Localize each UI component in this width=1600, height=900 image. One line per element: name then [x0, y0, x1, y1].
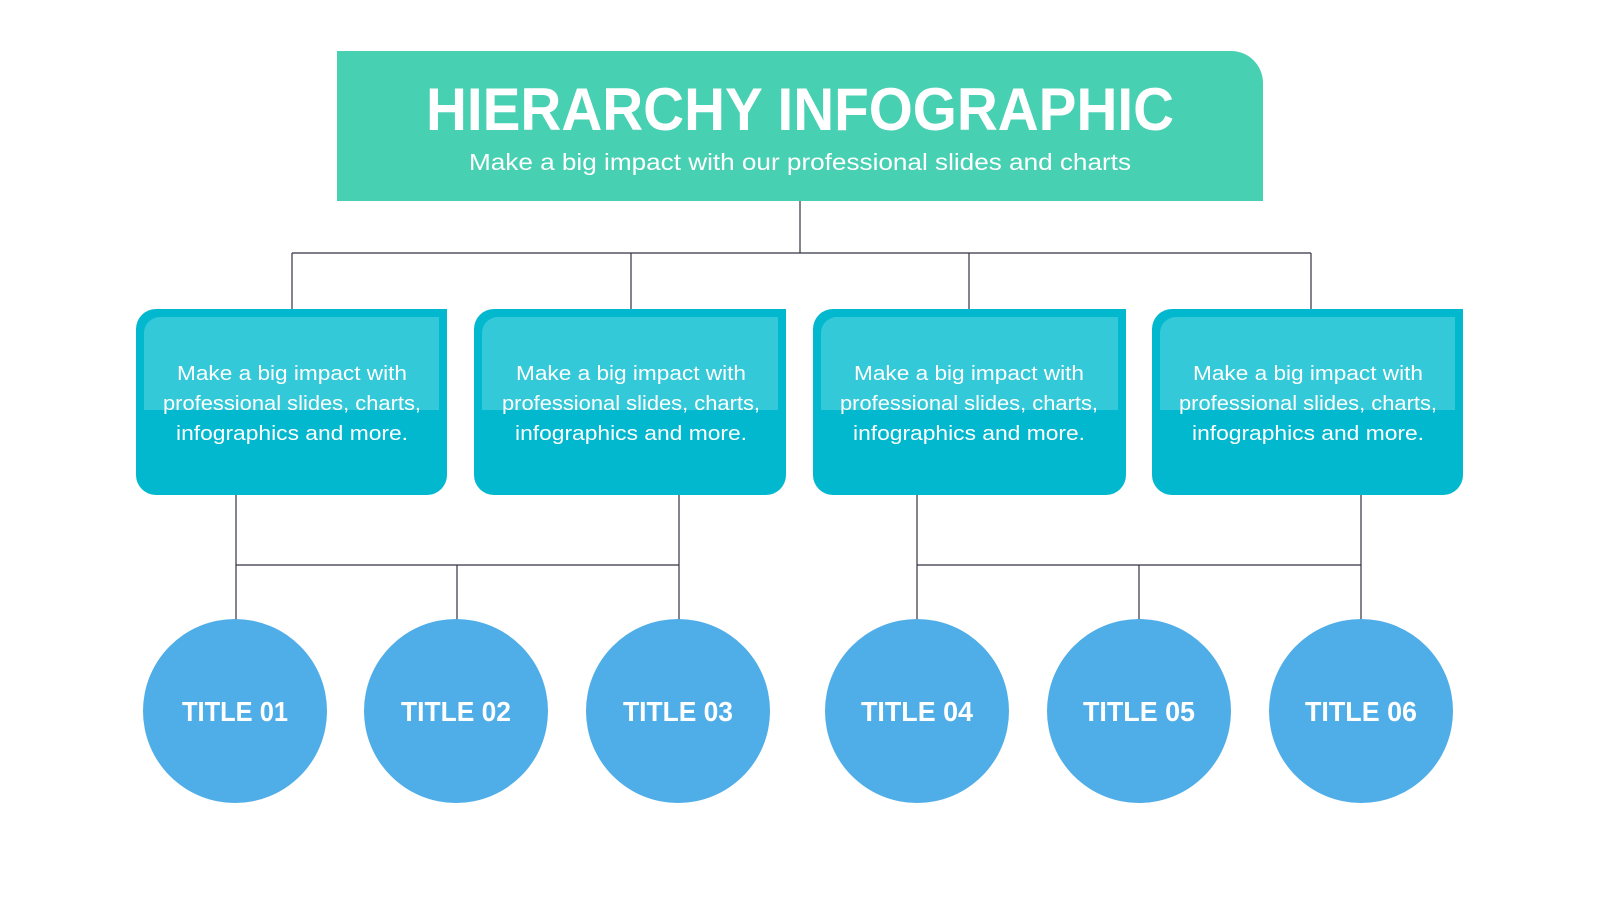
circle: title 03 — [586, 619, 770, 803]
box 3: infographics and more. — [853, 423, 1085, 445]
box 1: Make a big impact with — [177, 363, 407, 385]
circle: title 04: TITLE 04 — [861, 696, 973, 727]
circle: title 01 — [143, 619, 327, 803]
box 1: infographics and more. — [176, 423, 408, 445]
box 2: infographics and more. — [515, 423, 747, 445]
box 2: professional slides, charts, — [502, 393, 760, 415]
subtitle: Make a big impact with our professional slides and charts — [469, 149, 1131, 175]
box 1 — [136, 309, 447, 495]
box 3: professional slides, charts, — [840, 393, 1098, 415]
circle: title 04 — [825, 619, 1009, 803]
connector lines — [236, 201, 1361, 620]
circle: title 01: TITLE 01 — [182, 696, 288, 727]
box 4: infographics and more. — [1192, 423, 1424, 445]
box 2 — [474, 309, 786, 495]
box 1: professional slides, charts, — [163, 393, 421, 415]
circle: title 05 — [1047, 619, 1231, 803]
circle: title 06: TITLE 06 — [1305, 696, 1417, 727]
box 3: Make a big impact with — [854, 363, 1084, 385]
circle: title 06 — [1269, 619, 1453, 803]
circle: title 05: TITLE 05 — [1083, 696, 1195, 727]
box 4 — [1152, 309, 1463, 495]
box 3 — [813, 309, 1126, 495]
box 2: Make a big impact with — [516, 363, 746, 385]
circle: title 02 — [364, 619, 548, 803]
title banner — [337, 51, 1263, 201]
circle: title 03: TITLE 03 — [623, 696, 733, 727]
title: HIERARCHY INFOGRAPHIC — [426, 76, 1174, 143]
box 4: Make a big impact with — [1193, 363, 1423, 385]
box 4: professional slides, charts, — [1179, 393, 1437, 415]
circle: title 02: TITLE 02 — [401, 696, 511, 727]
